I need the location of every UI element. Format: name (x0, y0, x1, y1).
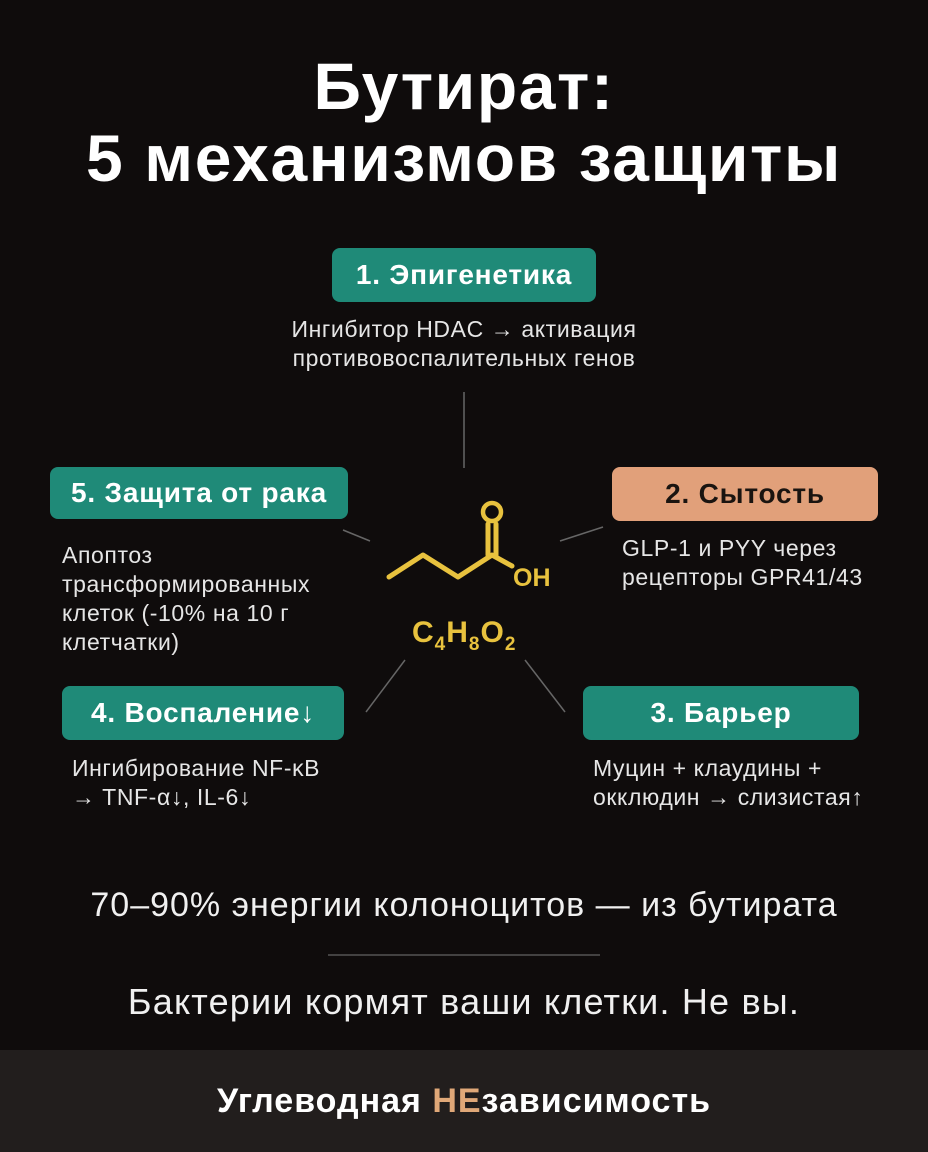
panel 3 heading (583, 686, 859, 740)
panel 2 heading: 2. Сытость (665, 478, 825, 509)
title: Бутират: (313, 49, 615, 123)
panel 5 text: трансформированных (62, 571, 310, 597)
molecule: butyrate: C (412, 616, 435, 649)
panel 2 text: рецепторы GPR41/43 (622, 564, 863, 590)
panel 3 text (593, 755, 863, 810)
stat text: 70–90% энергии колоноцитов — из бутирата (90, 886, 838, 924)
molecule: butyrate: 8 (469, 634, 480, 655)
panel 4 heading: 4. Воспаление↓ (91, 697, 315, 728)
panel 3 text: Муцин + клаудины + (593, 755, 822, 781)
panel 2 text: GLP-1 и PYY через (622, 535, 837, 561)
panel 1 text: Ингибитор HDAC → активация (291, 316, 636, 342)
title: 5 механизмов защиты (86, 121, 842, 195)
footer: НЕ (432, 1082, 482, 1120)
molecule: butyrate: 2 (505, 634, 516, 655)
panel 5 text: Апоптоз (62, 542, 153, 568)
panel 4 text: → TNF-α↓, IL-6↓ (72, 784, 251, 810)
panel 1 text (291, 316, 636, 371)
molecule: butyrate: O (480, 616, 505, 649)
panel 5 heading: 5. Защита от рака (71, 477, 327, 508)
panel 3 heading: 3. Барьер (650, 697, 792, 728)
panel 1 text: противовоспалительных генов (293, 345, 635, 371)
title (86, 49, 842, 195)
panel 4 text: Ингибирование NF-κB (72, 755, 320, 781)
panel 3 text: окклюдин → слизистая↑ (593, 784, 863, 810)
panel 5 heading (50, 467, 348, 519)
tagline: Бактерии кормят ваши клетки. Не вы. (128, 981, 800, 1022)
panel 4 text (72, 755, 320, 810)
panel 2 heading (612, 467, 878, 521)
panel 5 text: клеток (-10% на 10 г (62, 600, 289, 626)
footer: Углеводная зависимость (217, 1082, 711, 1120)
molecule: butyrate: OH (513, 564, 550, 592)
panel 1 heading (332, 248, 596, 302)
molecule: butyrate: 4 (435, 634, 446, 655)
panel 5 text (62, 542, 310, 655)
panel 1 heading: 1. Эпигенетика (356, 259, 572, 290)
panel 4 heading (62, 686, 344, 740)
molecule: butyrate: H (446, 616, 469, 649)
panel 5 text: клетчатки) (62, 629, 180, 655)
footer (0, 1050, 928, 1152)
molecule: butyrate (386, 500, 550, 655)
panel 2 text (622, 535, 863, 590)
